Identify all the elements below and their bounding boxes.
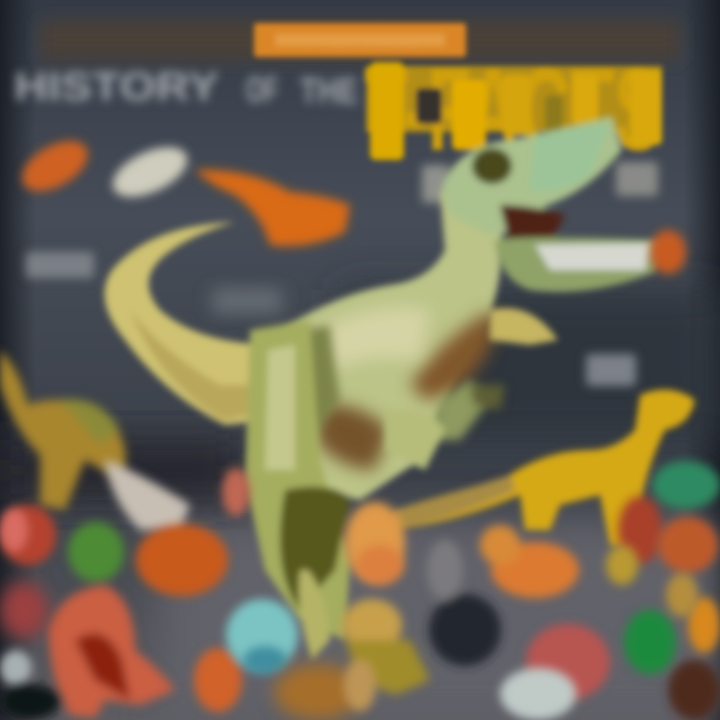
text block: right note: [586, 354, 636, 386]
illustration: brown dinosaur left: [0, 350, 126, 510]
toy: pink spot: [222, 468, 250, 516]
title: white line: OF: [246, 69, 278, 110]
toy: orange right: [480, 525, 579, 598]
neck highlight: [310, 308, 430, 385]
toy: orange: [136, 524, 228, 596]
text block: upper middle note: [422, 165, 450, 203]
body: [262, 190, 505, 500]
toy: grey white left: [0, 650, 32, 686]
toy: red big: [48, 585, 175, 718]
text block: middle note: [212, 288, 282, 314]
text block: left note: [26, 252, 94, 278]
toy: brown corner: [668, 660, 720, 720]
toy: peach base: [356, 545, 404, 585]
toy: left red low: [0, 582, 48, 638]
toy: tan bottom: [344, 659, 376, 711]
toy: red right low: [526, 624, 610, 700]
toy: green top right: [652, 461, 720, 509]
head: [442, 116, 660, 292]
tail: [104, 222, 280, 425]
toy: black: [427, 540, 501, 666]
toy: orange far right: [688, 597, 720, 653]
icon: orange leaf: [14, 131, 96, 201]
illustration: white bone pile: [105, 460, 190, 530]
toy: yellow small right: [606, 545, 638, 585]
toy: tan far right: [666, 573, 698, 617]
chest shading: [410, 310, 496, 400]
toy: black left: [0, 684, 60, 720]
toy cluster: foreground shapes: [0, 461, 720, 720]
toy: dark red right: [618, 496, 662, 564]
heading badge: orange banner: T-REX GUIDE: [302, 31, 418, 51]
arm: [490, 308, 558, 345]
illustration: main green T-rex: [104, 116, 686, 660]
toy: peach: [345, 502, 405, 582]
icon: white bone: [105, 137, 195, 207]
lower jaw: [495, 238, 660, 292]
title: white line: [14, 65, 358, 111]
toy: red left: [0, 505, 56, 565]
text block: upper right note: [616, 162, 658, 196]
body shadow: [300, 325, 340, 440]
title: white line: THE: [300, 70, 358, 111]
icon: orange flying reptile: [195, 170, 350, 246]
toy: white bottom: [500, 668, 576, 720]
tongue tip: [650, 230, 686, 274]
toy: green: [68, 522, 124, 582]
mouth: [500, 205, 565, 245]
toy: orange small: [194, 648, 242, 712]
illustration: yellow long-neck dinosaur: [385, 390, 695, 545]
toy: pink highlight: [0, 508, 28, 552]
toy: teal base: [243, 646, 287, 674]
heading badge: orange banner: [254, 23, 466, 57]
toy: amber bottom: [274, 664, 362, 720]
title: white line: HISTORY: [14, 65, 219, 109]
leg: [245, 320, 445, 660]
toy: rust right: [658, 517, 718, 573]
toy: teal: [226, 599, 298, 671]
toy: yellow tan: [342, 599, 430, 695]
toy: green low right: [624, 610, 676, 674]
